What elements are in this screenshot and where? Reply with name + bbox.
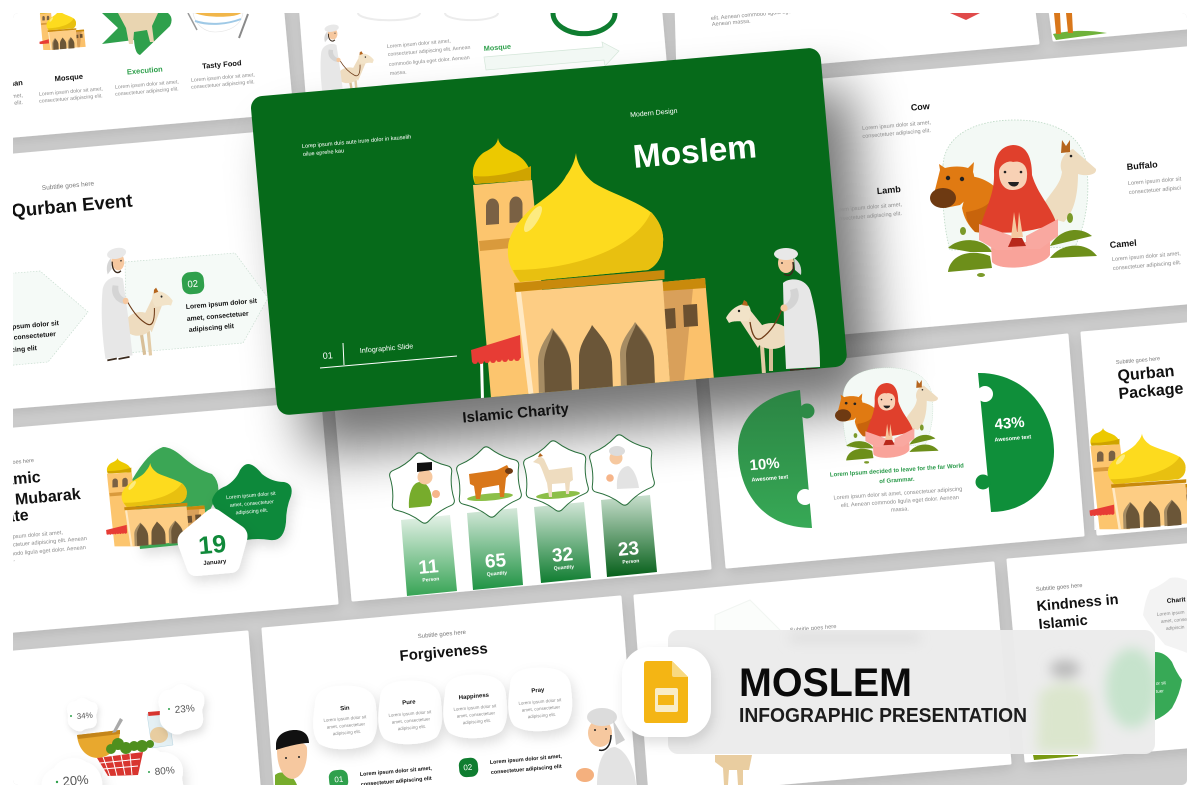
camel label: Lorem ipsum dolor sit amet,: [1112, 251, 1181, 263]
subtitle: Subtitle goes here: [790, 624, 837, 634]
camel label: Camel: [1109, 238, 1137, 250]
right puzzle piece: [976, 373, 1054, 512]
boy illustration: [275, 730, 309, 785]
description: commodo ligula eget dolor. Aenean: [0, 545, 86, 559]
olive strip: [1033, 755, 1078, 760]
card: Happiness: Happiness: [459, 693, 490, 701]
badge 01 text: [360, 766, 433, 788]
badge text: adipiscing elit: [189, 323, 235, 334]
green blob: tuer: [1156, 688, 1164, 694]
badge 01 text: consectetuer adipiscing elit: [361, 776, 432, 788]
slide: Forgiveness: [275, 630, 636, 790]
bar: 23 Person: Person: [622, 558, 640, 566]
slide: top right cropped: [711, 13, 980, 26]
title: Islamic: [1038, 613, 1088, 633]
pale blob with Charity label: Lorem ipsum: [1157, 610, 1185, 618]
mosque label: Mosque: [483, 42, 511, 53]
bowl of food: [188, 13, 248, 38]
slide: top middle mosque arrow: [320, 13, 620, 90]
card: Pure: Lorem ipsum dolor sit: [388, 709, 432, 718]
elder illustration: [576, 708, 636, 785]
badge 02: 02: [463, 763, 473, 772]
banner title: MOSLEM: [739, 661, 912, 705]
stat: 23%: [158, 684, 204, 735]
main green cover card: [250, 47, 848, 416]
card: Pray: adipiscing elit.: [528, 712, 556, 719]
right value: Awesome text: [994, 434, 1032, 444]
description: massa.: [390, 70, 407, 77]
mosque: [106, 458, 208, 547]
bar: 32 Quantity: Quantity: [554, 564, 574, 572]
blurred backdrop: [790, 634, 1158, 752]
puzzle text: elit. Aenean commodo ligula eget dolor. Aenean: [841, 495, 959, 509]
green arrow with goat: [102, 13, 172, 55]
stat: 80% label: 80%: [154, 765, 175, 778]
cover description: Lorep ipsum duis aute irure dolor in kauselih: [302, 134, 412, 150]
badge 01: 01: [334, 775, 344, 784]
column label: Tasty Food: Lorem ipsum dolor sit amet,: [191, 72, 255, 84]
card: Pray: [508, 668, 572, 731]
slide: puzzle pieces: [738, 368, 1054, 528]
subtitle: Subtitle goes here: [42, 180, 95, 192]
cow label: consectetuer adipiscing elit.: [862, 128, 932, 140]
puzzle text: Lorem Ipsum decided to leave for the far World: [830, 463, 964, 479]
cow label: [862, 104, 930, 138]
slide: food statistics: [42, 684, 204, 790]
subtitle: Subtitle goes here: [418, 630, 467, 640]
bar: 65 Quantity: [467, 508, 523, 590]
badge 02 text: Lorem ipsum dolor sit amet,: [490, 754, 563, 766]
white pentagon date: [178, 508, 248, 576]
column label: Mosque: Mosque: [54, 72, 83, 83]
badge text: Lorem ipsum dolor sit: [186, 298, 258, 311]
title: [1036, 592, 1119, 633]
card: Happiness: Lorem ipsum dolor sit: [453, 703, 497, 712]
slide: Cow Lamb Buffalo Camel: [833, 101, 1182, 277]
cropped column label: scing elit.: [0, 100, 24, 108]
food illustration: [77, 711, 173, 776]
stat: 34%: 34%: [76, 711, 93, 721]
slide: far right cow legs: [1053, 13, 1107, 40]
badge text: [186, 298, 258, 334]
puzzle text: Lorem ipsum dolor sit amet, consectetuer adipiscing: [833, 487, 962, 501]
cow label: Lorem ipsum dolor sit amet,: [862, 120, 932, 132]
stat: 20% blob: [42, 758, 102, 790]
left arrow panel: [13, 270, 88, 366]
buffalo label: [1127, 161, 1182, 194]
card: Sin: amet, consectetuer: [327, 721, 366, 730]
dark green star with text: adipiscing elit.: [235, 508, 268, 516]
mosque: [471, 138, 714, 400]
card: Happiness: amet, consectetuer: [457, 710, 496, 719]
cover description: [302, 134, 412, 158]
man with goat: [320, 24, 374, 90]
card: Sin: adipiscing elit.: [333, 729, 361, 736]
hex icon: cow: [455, 444, 523, 520]
card: Pure: Pure: [402, 699, 416, 707]
bar: 65 Quantity: 65: [484, 550, 507, 573]
bar: 65 Quantity: Quantity: [487, 570, 507, 578]
badge 01: [328, 769, 349, 790]
lamb label: Lamb: [876, 184, 902, 196]
card: Pure: [378, 681, 442, 744]
bar: 11 Person: [401, 515, 457, 596]
slide number block: Infographic Slide: [359, 341, 414, 355]
ring charts cropped: [358, 13, 615, 34]
column label: Mosque: [39, 74, 102, 103]
card: Pray: amet, consectetuer: [522, 704, 561, 713]
card: Sin: [313, 686, 377, 749]
description: [13, 530, 87, 562]
subtitle: Subtitle goes here: [1116, 356, 1160, 366]
badge 02: [181, 271, 205, 295]
slide: Islamic Charity: [388, 400, 657, 596]
lamb label: [844, 186, 902, 220]
bar: 11 Person: Person: [422, 576, 440, 584]
man with goat: [102, 248, 173, 362]
frosted banner: [668, 630, 1158, 754]
buffalo label: consectetuer adipisci: [1129, 185, 1181, 196]
buffalo label: Lorem ipsum dolor sit: [1128, 176, 1182, 187]
description: consectetuer adipiscing elit. Aenean: [0, 536, 87, 550]
card: Pray: Pray: [531, 687, 545, 695]
card: Pure: amet, consectetuer: [392, 716, 431, 725]
left value: Awesome text: [751, 474, 789, 484]
title: Qurban: [1117, 363, 1175, 385]
card illustrations: [471, 138, 820, 400]
cropped column label: sit amet,: [2, 93, 24, 101]
column label: Execution: consectetuer adipiscing elit.: [115, 86, 179, 98]
description: commodo ligula eget dolor. Aenean: [389, 55, 470, 68]
pale blob with Charity label: adipiscin: [1166, 624, 1185, 632]
title: Package: [1118, 380, 1184, 403]
faint arrow outline: [715, 600, 800, 680]
stat: 23%: 23%: [174, 703, 195, 716]
slide: Qurban Package: [1090, 356, 1200, 530]
man with goat: [726, 248, 820, 373]
column label: Mosque: consectetuer adipiscing elit.: [39, 93, 103, 105]
slide: top left categories: [13, 13, 254, 105]
bar: 11 Person: 11: [418, 556, 440, 579]
lamb label: consectetuer adipiscing elit.: [833, 211, 903, 223]
left value: 10%: [749, 455, 780, 474]
camel label: consectetuer adipiscing elit.: [1113, 260, 1182, 272]
title: Qurban Event: [11, 189, 133, 221]
slide: Eid Mubarak date: [0, 447, 292, 576]
title: Forgiveness: [399, 640, 488, 665]
bar: 23 Person: [601, 495, 657, 577]
woman with animals small: [835, 368, 939, 464]
column label: Tasty Food: [191, 60, 254, 89]
dark green star with text: amet, consectetuer: [230, 499, 274, 509]
column label: Tasty Food: Tasty Food: [202, 58, 242, 71]
goat legs: [715, 755, 752, 785]
pale arrow: [484, 42, 619, 70]
cropped column label: [13, 81, 22, 105]
card: Sin: Lorem ipsum dolor sit: [323, 714, 367, 723]
column label: Execution: Lorem ipsum dolor sit amet,: [115, 79, 179, 91]
red cloth: [950, 13, 980, 20]
badge text: amet, consectetuer: [187, 311, 249, 323]
badge 01 text: Lorem ipsum dolor sit amet,: [360, 766, 433, 778]
cover description: oilue eprehe kau: [303, 148, 344, 158]
card: Happiness: [443, 675, 507, 738]
bar: 32 Quantity: [534, 502, 591, 583]
subtitle: Subtitle goes here: [1036, 583, 1083, 593]
card: Happiness: adipiscing elit.: [463, 718, 491, 725]
title: Islamic Charity: [462, 400, 570, 427]
cow label: Cow: [910, 101, 931, 113]
badge 02 text: [490, 754, 563, 776]
puzzle text: massa.: [891, 506, 910, 514]
dark green star with text: [212, 464, 292, 540]
column label: Mosque: Lorem ipsum dolor sit amet,: [39, 86, 103, 98]
card: Pray: Lorem ipsum dolor sit: [518, 697, 562, 706]
woman with animals: [930, 120, 1097, 277]
title: Kindness in: [1036, 592, 1119, 615]
title: [1117, 363, 1184, 403]
description: consectetuer adipiscing elit. Aenean: [388, 45, 471, 58]
mosque thumbnail: [40, 13, 86, 50]
icon: google slides: [622, 647, 711, 737]
right arrow panel: [125, 253, 268, 353]
bar: 32 Quantity: 32: [551, 544, 574, 567]
cropped text: [711, 13, 790, 26]
green blob: [1155, 652, 1182, 720]
badge 02: 02: [187, 279, 199, 290]
green blob: or sit: [1156, 680, 1167, 686]
banner subtitle: INFOGRAPHIC PRESENTATION: [739, 704, 1027, 727]
puzzle text: of Grammar.: [879, 477, 915, 485]
hex icon: goat: [522, 438, 590, 514]
hex icon: elder: [588, 432, 656, 508]
pale blob with Charity label: [1143, 578, 1190, 654]
left value: [749, 455, 789, 484]
slide number block: 01: [322, 350, 333, 361]
badge 02: [458, 757, 479, 778]
hex icon: boy: [388, 450, 456, 526]
description: [387, 38, 471, 77]
modern design label: Modern Design: [630, 108, 678, 119]
slide: Kindness in Islamic: [1033, 578, 1190, 760]
dark green star with text: Lorem ipsum dolor sit: [226, 491, 276, 501]
slide: middle bottom under banner: [715, 600, 837, 785]
lamb label: Lorem ipsum dolor sit amet,: [833, 202, 903, 214]
bar: 23 Person: 23: [617, 538, 640, 561]
stat: 80% blob: [100, 746, 184, 790]
puzzle text: [830, 463, 964, 514]
stat: 20% label: 20%: [62, 772, 90, 789]
slide number block: [320, 341, 457, 368]
right value: 43%: [994, 414, 1025, 433]
heading block: [13, 459, 81, 522]
white pentagon date: January: [203, 559, 227, 567]
pale blob with Charity label: Charit: [1167, 596, 1187, 605]
pale blob with Charity label: amet, conse: [1161, 617, 1188, 625]
camel label: [1110, 239, 1181, 270]
main card shadow: [280, 85, 878, 454]
column label: Execution: [115, 66, 178, 96]
buffalo label: Buffalo: [1126, 159, 1159, 172]
badge 02 text: consectetuer adipiscing elit: [491, 764, 562, 776]
cover title: Moslem: [631, 127, 758, 175]
slide: Qurban Event: [0, 180, 268, 366]
white pentagon date: 19: [197, 530, 227, 560]
stat: 34%: [67, 698, 98, 731]
cropped text: elit. Aenean commodo ligula eget dolor.: [711, 7, 809, 22]
card: Pure: adipiscing elit.: [398, 724, 426, 731]
mosque: [1090, 428, 1200, 530]
description: Lorem ipsum dolor sit amet,: [387, 38, 451, 50]
column label: Tasty Food: consectetuer adipiscing elit.: [191, 79, 255, 91]
green backdrop blob: [132, 447, 218, 549]
card: Sin: Sin: [340, 706, 350, 712]
cropped text: Aenean massa.: [712, 19, 751, 28]
left puzzle piece: [738, 390, 814, 528]
right value: [994, 414, 1032, 444]
column label: Execution: Execution: [127, 64, 163, 77]
